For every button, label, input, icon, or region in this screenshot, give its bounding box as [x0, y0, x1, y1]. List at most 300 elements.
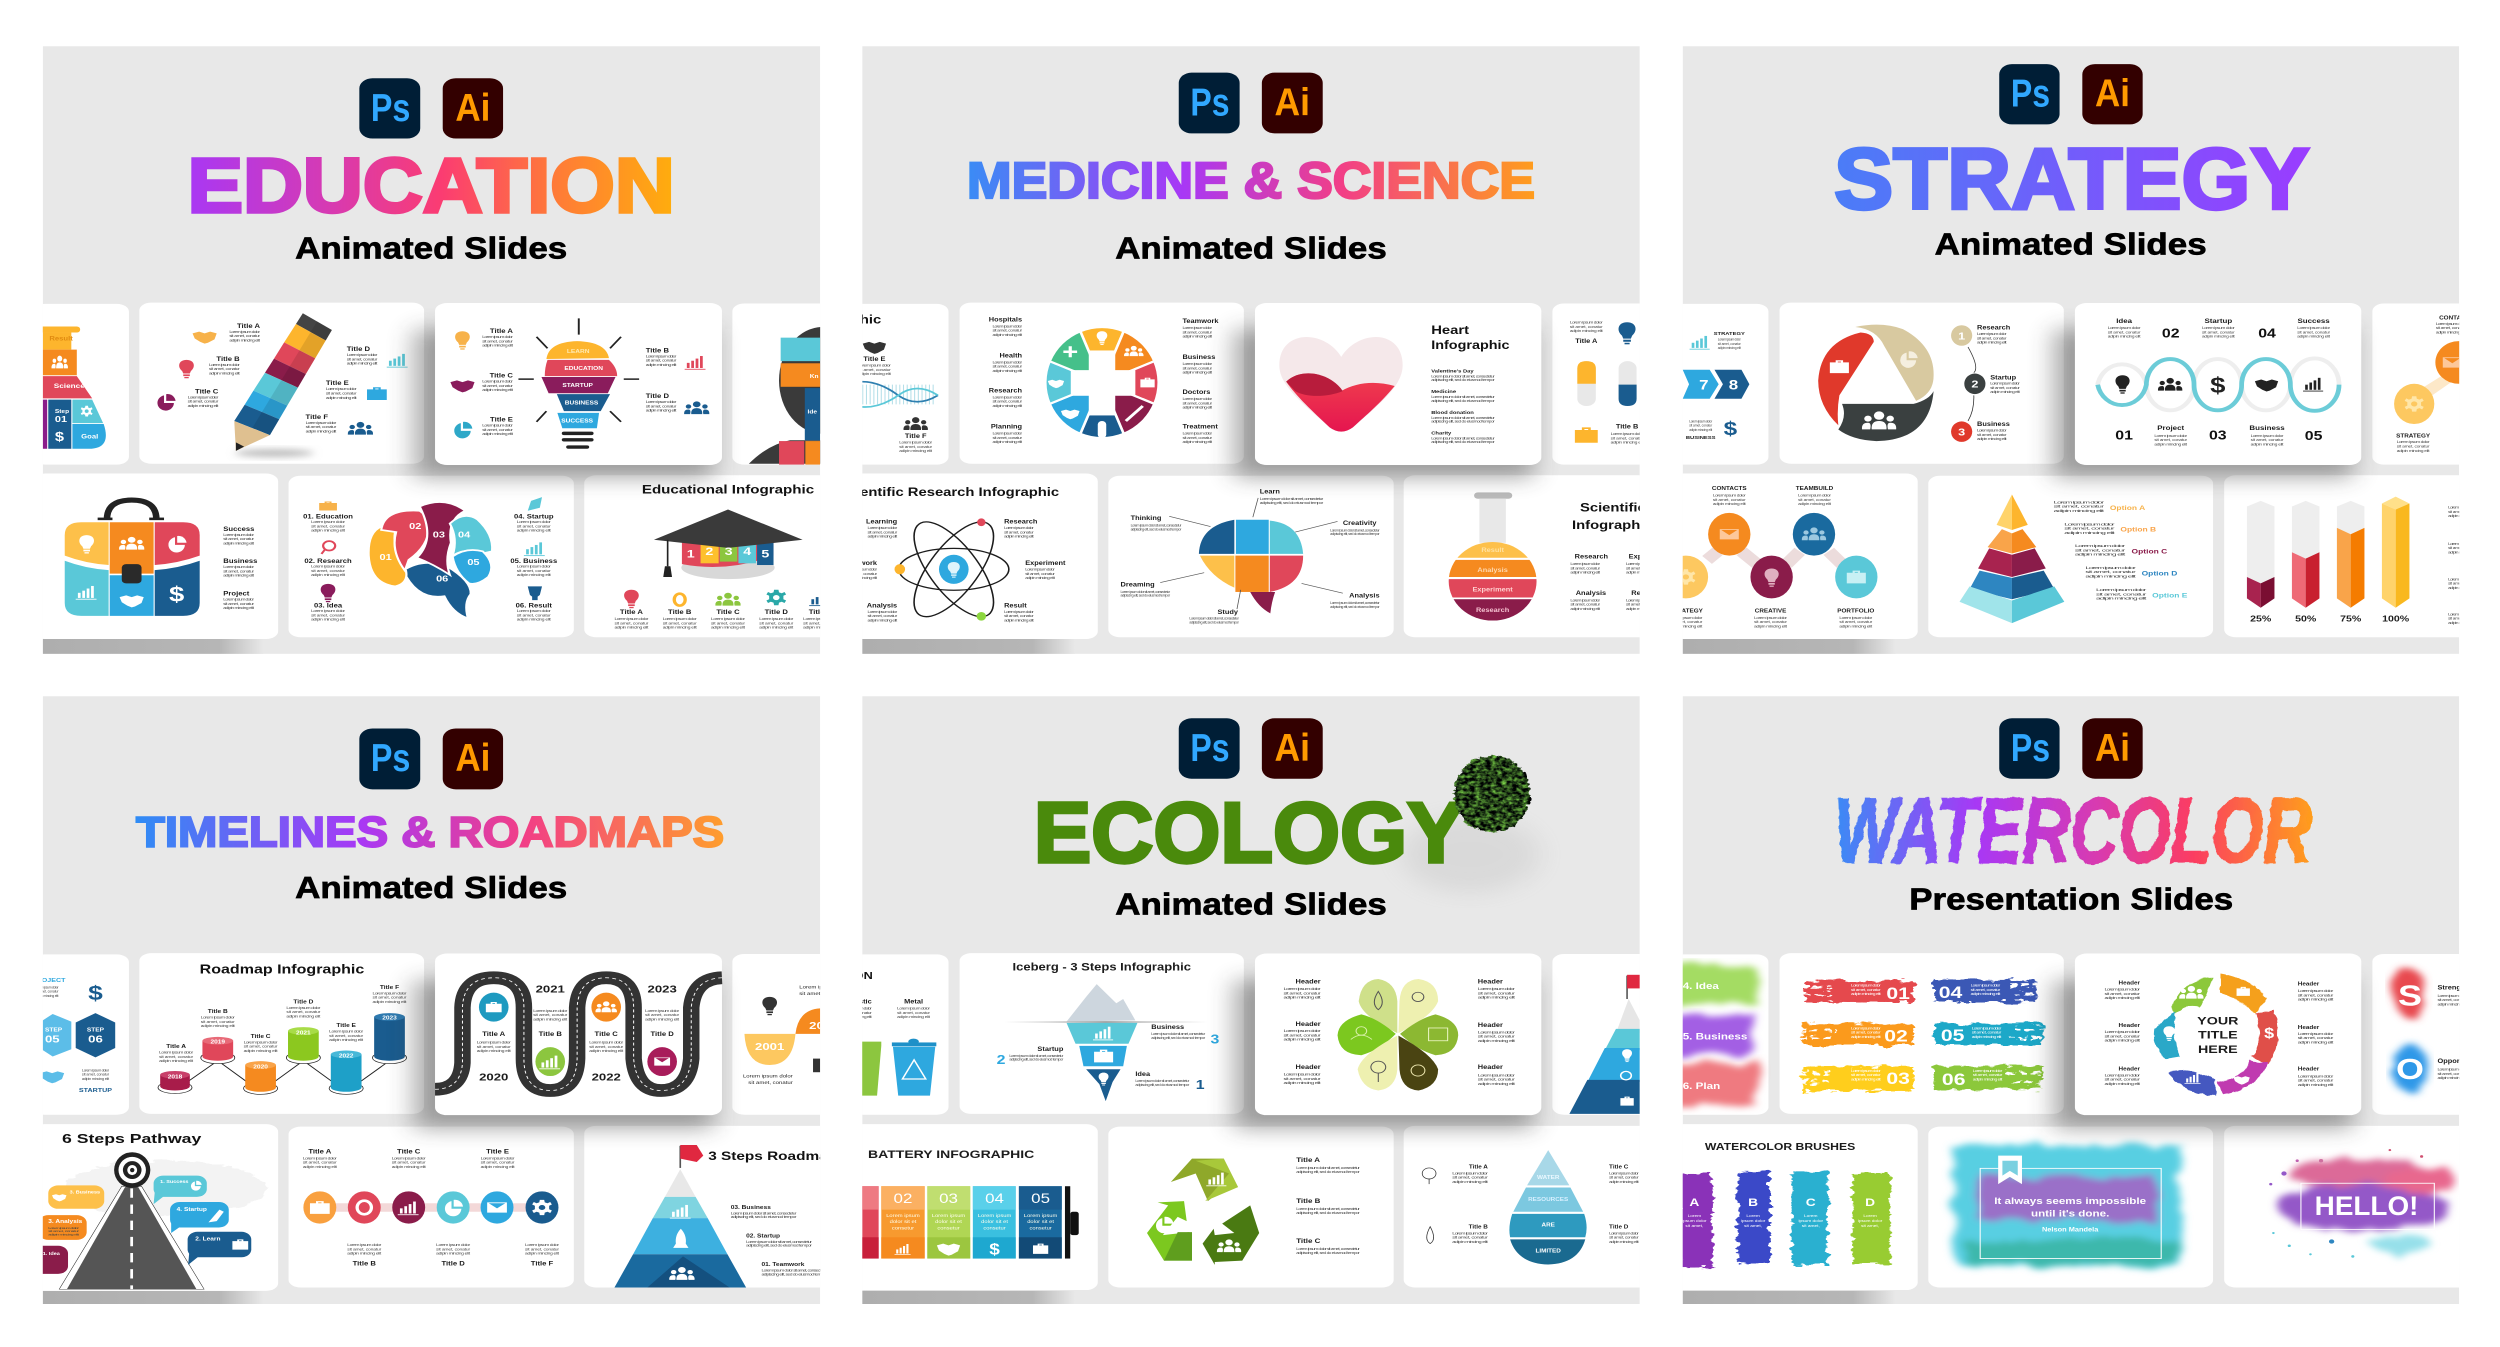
card: hexagon steps: PROJECT: [32, 978, 66, 984]
card: battery: consetur: [892, 1226, 914, 1231]
card: pencil infographic: Title F: [306, 415, 328, 421]
card: flask puzzle: Goal: [81, 434, 98, 440]
card: percentage columns: 100%: [2382, 614, 2410, 624]
card: circle timeline: Title C: [397, 1149, 420, 1155]
card: human head puzzle: [732, 304, 820, 465]
card: brush bars: 03: [1886, 1070, 1910, 1089]
card: brushes columns: Lorem: [1863, 1213, 1877, 1218]
card: iceberg: Startup: [1037, 1047, 1063, 1053]
card: circle timeline: Title B: [353, 1261, 376, 1267]
card: iceberg: Business: [1151, 1025, 1184, 1031]
card: iceberg: Iceberg - 3 Steps Infographic: [1013, 961, 1191, 973]
card: quote: [1928, 1127, 2213, 1287]
card: percentage columns: 25%: [2250, 614, 2272, 624]
card: pencil infographic: Title C: [195, 389, 218, 395]
mountain: [614, 1169, 746, 1287]
tree: [1454, 756, 1530, 832]
card: battery: consetur: [937, 1226, 960, 1231]
card: hexagon steps: [32, 954, 129, 1115]
card: brushes columns: sit amet,: [1744, 1224, 1762, 1228]
card: circle timeline: Title D: [441, 1261, 465, 1267]
card: brain infographic: 04: [458, 531, 471, 540]
card: medical cross wheel: Doctors: [1182, 390, 1211, 396]
icon: Illustrator badge: Ai: [2095, 726, 2130, 770]
card: brushes columns: ipsum dolor: [1799, 1218, 1824, 1223]
card: scientific flask: Result: [1631, 590, 1655, 597]
card: wave timeline: [2075, 303, 2361, 465]
card: scientific flask: Experiment: [1472, 587, 1514, 593]
card: water drop: [1404, 1126, 1658, 1287]
card: circle timeline: Title E: [486, 1149, 509, 1155]
card: six steps pathway: 6 Steps Pathway: [62, 1132, 202, 1146]
card: puzzle brain: Learn: [1260, 489, 1280, 495]
card: clover infographic: Header: [1295, 979, 1321, 986]
splash: [2279, 1157, 2459, 1253]
card: iceberg: Idea: [1135, 1072, 1150, 1078]
card: water drop: LIMITED: [1536, 1249, 1561, 1254]
card: three part circle: Business: [1977, 422, 2010, 428]
card: clover infographic: Header: [1478, 979, 1503, 986]
card: watercolor list: 5. Business: [1683, 1031, 1747, 1042]
pyramid: [1960, 495, 2064, 623]
card: light bulb infographic: Title C: [490, 373, 513, 379]
speech bubbles: 3. Analysis: [48, 1220, 83, 1225]
card: mountain roadmap: 02. Startup: [746, 1234, 780, 1239]
card: scientific flask: Infographic: [1572, 518, 1653, 532]
card: capsule infographic: Title B: [1616, 424, 1638, 430]
icon: Illustrator badge: [1262, 718, 1323, 779]
card: mountain roadmap: [584, 1126, 837, 1287]
card: quote: until it's done.: [2031, 1208, 2109, 1219]
card: brush bars: 05: [1941, 1027, 1965, 1046]
title: MEDICINE & SCIENCE: MEDICINE & SCIENCE: [967, 153, 1535, 209]
card: chevrons: 8: [1729, 378, 1739, 393]
bulb stack: EDUCATION: [564, 367, 603, 372]
card: atom infographic: Analysis: [867, 603, 897, 609]
card: briefcase infographic: Project: [223, 591, 250, 597]
card: heart infographic: [1255, 303, 1541, 465]
card: wave timeline: 04: [2258, 327, 2276, 341]
card: brush bars: 01: [1886, 985, 1910, 1003]
card: brush cycle: HERE: [2198, 1042, 2238, 1056]
card: water drop: ARE: [1542, 1223, 1555, 1228]
card: waste bins: ION: [850, 971, 873, 982]
card: battery: [851, 1124, 1098, 1290]
card: cylinder roadmap: 2021: [296, 1031, 311, 1036]
heart: [1279, 337, 1403, 432]
card: graduation cap infographic: Title A: [620, 610, 643, 616]
card: quote: Nelson Mandela: [2042, 1227, 2099, 1233]
card: heart infographic: Heart: [1431, 324, 1470, 337]
panel: timelines and roadmaps: [32, 696, 837, 1304]
card: battery: dolor sit et: [1027, 1220, 1055, 1225]
card: linked circles: STRATEGY: [1669, 609, 1703, 614]
card: graduation cap infographic: Title C: [716, 610, 740, 616]
card: three part circle: [1780, 303, 2064, 464]
card: brushes columns: WATERCOLOR BRUSHES: [1705, 1142, 1856, 1153]
card: capsule infographic: [1552, 303, 1653, 465]
card: chevrons: 7: [1699, 378, 1709, 393]
card: SWOT watercolor: [2372, 954, 2486, 1115]
card: three part circle: Startup: [1990, 375, 2016, 381]
card: three part circle: 2: [1971, 380, 1978, 390]
card: graduation cap infographic: Educational Infographic: [642, 483, 815, 496]
card: three part circle: Research: [1977, 325, 2010, 331]
card: heart infographic: Infographic: [1431, 339, 1510, 352]
card: clover infographic: Header: [1478, 1023, 1503, 1029]
card: clover infographic: Header: [1478, 1065, 1503, 1071]
card: cylinder roadmap: Title B: [208, 1010, 228, 1015]
card: puzzle brain: Thinking: [1131, 516, 1161, 522]
card: half circle timeline: 2001: [755, 1041, 785, 1053]
card: winding road: 2021: [536, 984, 565, 995]
bulb stack: BUSINESS: [565, 401, 598, 406]
card: brain infographic: 06: [436, 574, 449, 584]
icon: Illustrator badge: [443, 728, 503, 789]
icon: Illustrator badge: Ai: [455, 736, 490, 780]
brain: [369, 502, 492, 618]
card: atom infographic: Learning: [866, 519, 897, 525]
card: brain infographic: 05: [467, 558, 480, 568]
cylinders: [158, 1013, 407, 1094]
card: brush bars: [1780, 953, 2064, 1114]
icon: Photoshop badge: Ps: [1190, 81, 1230, 124]
card: mountain roadmap: 3 Steps Roadmap: [708, 1149, 837, 1162]
card: recycling arrows: [1108, 1127, 1394, 1287]
card: waste bins: Plastic: [848, 999, 872, 1006]
card: wave timeline: Project: [2157, 424, 2185, 432]
clover: [1338, 979, 1458, 1091]
target: [114, 1152, 150, 1188]
bulb rays: [518, 318, 639, 422]
card: brushes columns: sit amet,: [1685, 1224, 1703, 1228]
iceberg: [1004, 984, 1208, 1101]
card: light bulb infographic: Title A: [490, 329, 513, 335]
title: EDUCATION: EDUCATION: [188, 142, 675, 229]
card: scientific flask: Experiment: [1629, 554, 1670, 560]
card: battery: 03: [939, 1191, 958, 1206]
speech bubbles: 4. Startup: [177, 1207, 207, 1213]
icon: Photoshop badge: [1179, 718, 1240, 779]
card: half circle timeline: Lorem ipsum: [799, 985, 835, 990]
card: winding road: 2022: [592, 1072, 621, 1083]
card: contacts partial: STRATEGY: [2396, 434, 2430, 439]
card: 3D pyramid: Option E: [2152, 591, 2187, 599]
card: cylinder roadmap: Title A: [166, 1045, 187, 1050]
card: battery: Lorem ipsum: [886, 1213, 920, 1219]
card: hexagon steps: $: [88, 982, 103, 1004]
watercolor wash: [1953, 1146, 2181, 1267]
bulb stack: LEARN: [567, 350, 590, 355]
card: brain infographic: 02. Research: [304, 559, 352, 565]
card: scientific flask: Research: [1476, 608, 1509, 614]
icon: Photoshop badge: Ps: [2011, 72, 2050, 115]
card: wave timeline: Business: [2249, 424, 2285, 432]
icon: Photoshop badge: Ps: [2011, 726, 2050, 770]
card: brush cycle: Header: [2119, 1024, 2141, 1029]
card: graduation cap infographic: Title D: [765, 610, 788, 616]
speech bubbles: 1. Idea: [43, 1252, 60, 1257]
card: cylinder roadmap: Title D: [293, 1000, 313, 1005]
card: half circle timeline: [732, 954, 837, 1115]
card: puzzle brain: Dreaming: [1121, 582, 1155, 588]
icon: Illustrator badge: [1262, 73, 1323, 133]
brush bars: [1800, 980, 2046, 1091]
card: brushes columns: sit amet,: [1861, 1224, 1879, 1228]
card: graduation cap infographic: [584, 475, 838, 637]
card: briefcase infographic: $: [169, 583, 185, 607]
card: battery: Lorem ipsum: [932, 1213, 966, 1219]
card: brushes columns: sit amet,: [1802, 1224, 1820, 1228]
card: battery: $: [989, 1240, 1000, 1258]
speech bubbles: [33, 1176, 251, 1274]
card: hexagon steps: 05: [45, 1034, 60, 1045]
icon: Photoshop badge: Ps: [371, 85, 410, 130]
card: recycling arrows: Title C: [1296, 1237, 1320, 1245]
graduation cap: 3: [725, 544, 733, 557]
graduation cap: 1: [687, 547, 695, 560]
card: puzzle brain: Study: [1217, 610, 1238, 616]
card: water drop: WATER: [1537, 1175, 1560, 1181]
card: winding road: Title D: [651, 1032, 674, 1038]
cycle diagram: [1818, 325, 1934, 441]
card: heart infographic: Medicine: [1431, 390, 1456, 395]
card: light bulb infographic: Title E: [490, 417, 513, 423]
card: flask puzzle: Result: [49, 336, 74, 342]
card: battery: Lorem ipsum: [1024, 1213, 1058, 1219]
card: brushes columns: A: [1689, 1196, 1699, 1209]
card: percentage columns: [2224, 475, 2479, 637]
card: medical cross wheel: Hospitals: [989, 317, 1022, 323]
card: medical cross wheel: Business: [1182, 355, 1216, 361]
subtitle: Animated Slides: [295, 231, 567, 266]
card: brush bars: 06: [1942, 1071, 1965, 1089]
card: atom infographic: Research: [1004, 519, 1037, 525]
recycle symbol: [1147, 1159, 1259, 1265]
subtitle: Presentation Slides: [1909, 883, 2233, 917]
panel: watercolor: [1670, 696, 2486, 1304]
icon: Illustrator badge: [443, 78, 503, 138]
card: contacts partial: [2372, 303, 2482, 465]
brain puzzle: [1199, 520, 1303, 613]
card: chevrons: STRATEGY: [1714, 332, 1745, 337]
card: hello splash: HELLO!: [2315, 1192, 2418, 1221]
card: scientific flask: Analysis: [1576, 590, 1606, 597]
card: graduation cap infographic: Title B: [668, 610, 691, 616]
card: atom infographic: Experiment: [1025, 561, 1066, 567]
card: scientific flask: Analysis: [1477, 567, 1508, 574]
card: puzzle brain: Creativity: [1343, 520, 1377, 527]
card: DNA infographic: hic: [860, 313, 882, 326]
card: flask puzzle: Step: [55, 409, 70, 415]
card: medical cross wheel: Treatment: [1182, 424, 1219, 430]
card: winding road: Title C: [595, 1032, 618, 1038]
card: winding road: 2020: [479, 1072, 509, 1083]
card: hello splash: [2224, 1126, 2478, 1287]
card: iceberg: 1: [1196, 1079, 1205, 1093]
card: brush cycle: TITLE: [2198, 1028, 2238, 1041]
icon: Photoshop badge: Ps: [1190, 726, 1230, 770]
card: brushes columns: B: [1748, 1196, 1758, 1209]
road: [59, 1186, 204, 1289]
title: TIMELINES & ROADMAPS: TIMELINES & ROADMAPS: [136, 809, 724, 856]
card: water drop: RESOURCES: [1528, 1198, 1568, 1203]
card: heart infographic: Charity: [1431, 431, 1451, 436]
card: circle timeline: [289, 1127, 574, 1287]
card: brain infographic: 01. Education: [303, 514, 353, 520]
card: 3D pyramid: Option B: [2120, 525, 2157, 533]
card: wave timeline: 05: [2305, 430, 2322, 444]
card: scientific flask: Scientific: [1580, 501, 1646, 514]
card: cylinder roadmap: Title C: [251, 1034, 271, 1039]
card: recycling arrows: Title A: [1296, 1156, 1320, 1164]
card: water drop: Title B: [1469, 1225, 1488, 1230]
card: pencil infographic: Title B: [216, 357, 240, 363]
card: battery: dolor sit et: [935, 1220, 962, 1225]
card: linked circles: PORTFOLIO: [1837, 609, 1875, 614]
card: brushes columns: ipsum dolor: [1682, 1218, 1707, 1223]
card: linked circles: CREATIVE: [1755, 609, 1787, 614]
card: battery: dolor sit et: [981, 1220, 1009, 1225]
card: wave timeline: $: [2210, 374, 2226, 399]
card: six steps pathway: [33, 1124, 278, 1291]
card: recycling arrows: Title B: [1296, 1197, 1320, 1205]
card: brush cycle: Header: [2298, 1067, 2320, 1072]
card: quote: It always seems impossible: [1994, 1196, 2146, 1207]
card: puzzle brain: [1108, 476, 1394, 637]
icon: Illustrator badge: Ai: [2095, 72, 2130, 115]
card: brain infographic: 03: [433, 531, 446, 540]
card: atom infographic: Teamwork: [841, 561, 877, 567]
card: battery: 02: [894, 1191, 912, 1206]
card: brush cycle: [2075, 954, 2361, 1115]
card: flask puzzle: [42, 304, 129, 464]
card: winding road: 2023: [648, 984, 677, 995]
brush columns: [1681, 1171, 1890, 1267]
battery cells: [862, 1186, 1079, 1259]
card: graduation cap infographic: Title E: [809, 610, 832, 616]
card: 3D pyramid: [1928, 476, 2213, 637]
card: SWOT watercolor: Opportunities: [2437, 1058, 2486, 1065]
card: SWOT watercolor: S: [2398, 979, 2422, 1012]
card: cylinder roadmap: 2022: [339, 1054, 354, 1059]
card: atom infographic: Scientific Research Infographic: [838, 485, 1060, 498]
card: battery: Lorem ipsum: [978, 1213, 1012, 1219]
card: brush cycle: Header: [2298, 982, 2320, 987]
bulb stack: [541, 341, 617, 449]
card: wave timeline: 01: [2115, 429, 2133, 443]
wave line: [2098, 358, 2339, 411]
icon: Photoshop badge: [359, 78, 420, 138]
card: hexagon steps: 06: [88, 1034, 103, 1045]
atom: [900, 521, 1010, 618]
card: human head puzzle: Ide: [808, 410, 818, 415]
card: cylinder roadmap: 2020: [253, 1065, 269, 1070]
card: watercolor list: [1670, 954, 1768, 1115]
bulb stack: STARTUP: [562, 384, 593, 389]
card: capsule infographic: Title A: [1575, 339, 1598, 345]
subtitle: Animated Slides: [1115, 888, 1387, 921]
subtitle: Animated Slides: [1935, 228, 2207, 262]
speech bubbles: 3. Business: [70, 1190, 100, 1195]
card: brain infographic: 03. Idea: [314, 603, 342, 609]
card: medical cross wheel: Teamwork: [1182, 319, 1219, 325]
icon: Illustrator badge: Ai: [1275, 81, 1310, 124]
card: 3D pyramid: Option A: [2110, 504, 2146, 512]
card: brain infographic: 04. Startup: [514, 514, 554, 520]
icon: Photoshop badge: [1999, 718, 2060, 779]
card: percentage columns: 50%: [2295, 614, 2317, 624]
card: watercolor list: 4. Idea: [1683, 981, 1719, 991]
card: briefcase infographic: [33, 474, 278, 639]
card: circle timeline: Title A: [308, 1149, 331, 1155]
card: brushes columns: Lorem: [1688, 1213, 1702, 1218]
card: 3D pyramid: Option D: [2142, 569, 2178, 577]
title: STRATEGY: STRATEGY: [1834, 130, 2309, 227]
card: brushes columns: C: [1806, 1196, 1816, 1209]
card: medical cross wheel: [960, 303, 1244, 464]
card: brush cycle: YOUR: [2197, 1014, 2239, 1027]
card: iceberg: 3: [1211, 1033, 1219, 1047]
card: water drop: Title C: [1609, 1165, 1628, 1170]
card: brushes columns: ipsum dolor: [1741, 1218, 1766, 1223]
card: circle timeline: Title F: [531, 1261, 553, 1267]
card: water drop: Title D: [1609, 1225, 1628, 1230]
icon: Photoshop badge: [1999, 64, 2060, 124]
card: puzzle brain: Analysis: [1349, 593, 1380, 599]
card: cylinder roadmap: 2023: [382, 1016, 398, 1021]
card: flask puzzle: Science: [54, 382, 85, 390]
title: ECOLOGY: ECOLOGY: [1034, 786, 1465, 881]
graduation cap: [654, 509, 803, 579]
card: heart infographic: Blood donation: [1431, 411, 1474, 416]
icon: Photoshop badge: [1179, 73, 1240, 133]
graduation cap: 2: [705, 544, 713, 557]
card: briefcase infographic: Business: [223, 559, 258, 565]
subtitle: Animated Slides: [1115, 232, 1387, 266]
card: three part circle: 3: [1958, 428, 1965, 438]
card: scientific flask: Result: [1481, 547, 1505, 554]
card: DNA infographic: Title E: [863, 357, 886, 363]
card: SWOT watercolor: O: [2396, 1052, 2424, 1085]
card: brushes columns: D: [1865, 1196, 1875, 1209]
speech bubbles: 1. Success: [160, 1180, 189, 1185]
subtitle: Animated Slides: [295, 871, 567, 905]
card: medical cross wheel: Research: [989, 388, 1022, 394]
card: waste bins: [842, 954, 949, 1115]
card: brain infographic: 01: [380, 553, 392, 563]
card: medical cross wheel: Planning: [991, 424, 1022, 430]
icon: Illustrator badge: Ai: [455, 85, 490, 130]
card: mountain partial: [1552, 954, 1653, 1115]
card: brain infographic: 05. Business: [510, 559, 557, 565]
graduation cap: 5: [761, 547, 769, 560]
card: mountain roadmap: 03. Business: [731, 1205, 772, 1211]
card: human head puzzle: Kn: [810, 374, 819, 380]
card: mountain roadmap: 01. Teamwork: [761, 1263, 805, 1268]
card: DNA infographic: [862, 304, 948, 464]
card: atom infographic: [838, 474, 1098, 639]
panel: ecology: [842, 696, 1658, 1304]
card: chevrons: [1670, 304, 1768, 465]
card: iceberg: [960, 953, 1244, 1114]
card: pencil infographic: Title E: [326, 381, 349, 387]
bulb stack: SUCCESS: [561, 419, 593, 424]
card: brush cycle: $: [2264, 1026, 2274, 1042]
icon: Illustrator badge: [2082, 718, 2143, 779]
card: battery: consetur: [1029, 1226, 1052, 1231]
card: 3D pyramid: Option C: [2132, 547, 2168, 555]
